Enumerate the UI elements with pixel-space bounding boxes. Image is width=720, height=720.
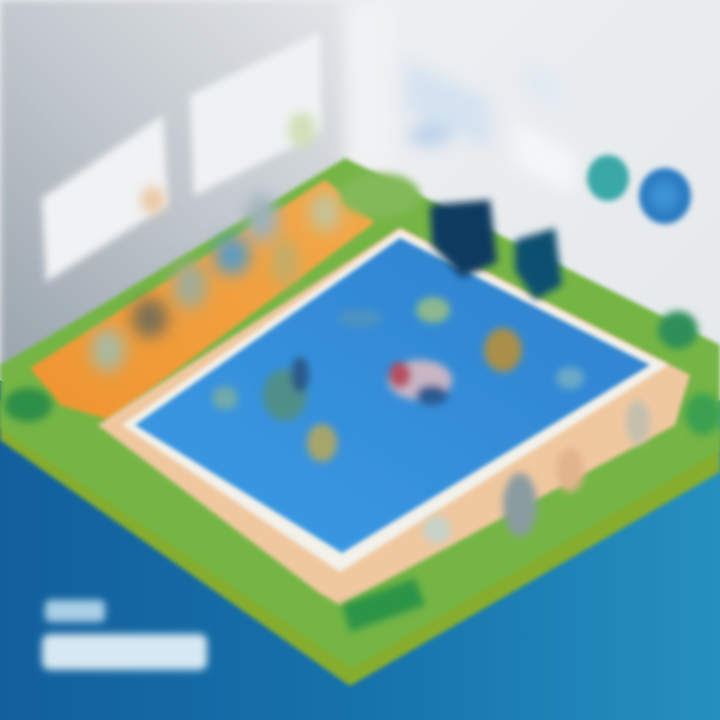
pool figures <box>212 297 584 462</box>
wall panel: centre chart board <box>141 32 322 214</box>
wall panels: right blue charts <box>405 60 575 195</box>
blue pool <box>135 238 650 553</box>
wall panel: left chart board <box>42 115 168 282</box>
title block, blurred white label <box>42 600 207 670</box>
orange strip figures <box>91 192 341 372</box>
dark server towers <box>430 200 562 300</box>
peach rim <box>98 228 690 605</box>
isometric platform <box>0 158 720 686</box>
peach wall figures <box>423 400 650 544</box>
platform green top <box>0 158 720 668</box>
blue floor <box>0 380 720 720</box>
icon: teal and blue circles on the wall <box>587 155 691 224</box>
platform base shadow side <box>0 400 720 686</box>
orange strip <box>30 180 375 420</box>
green bushes <box>4 173 720 632</box>
white pool edge <box>122 230 668 572</box>
